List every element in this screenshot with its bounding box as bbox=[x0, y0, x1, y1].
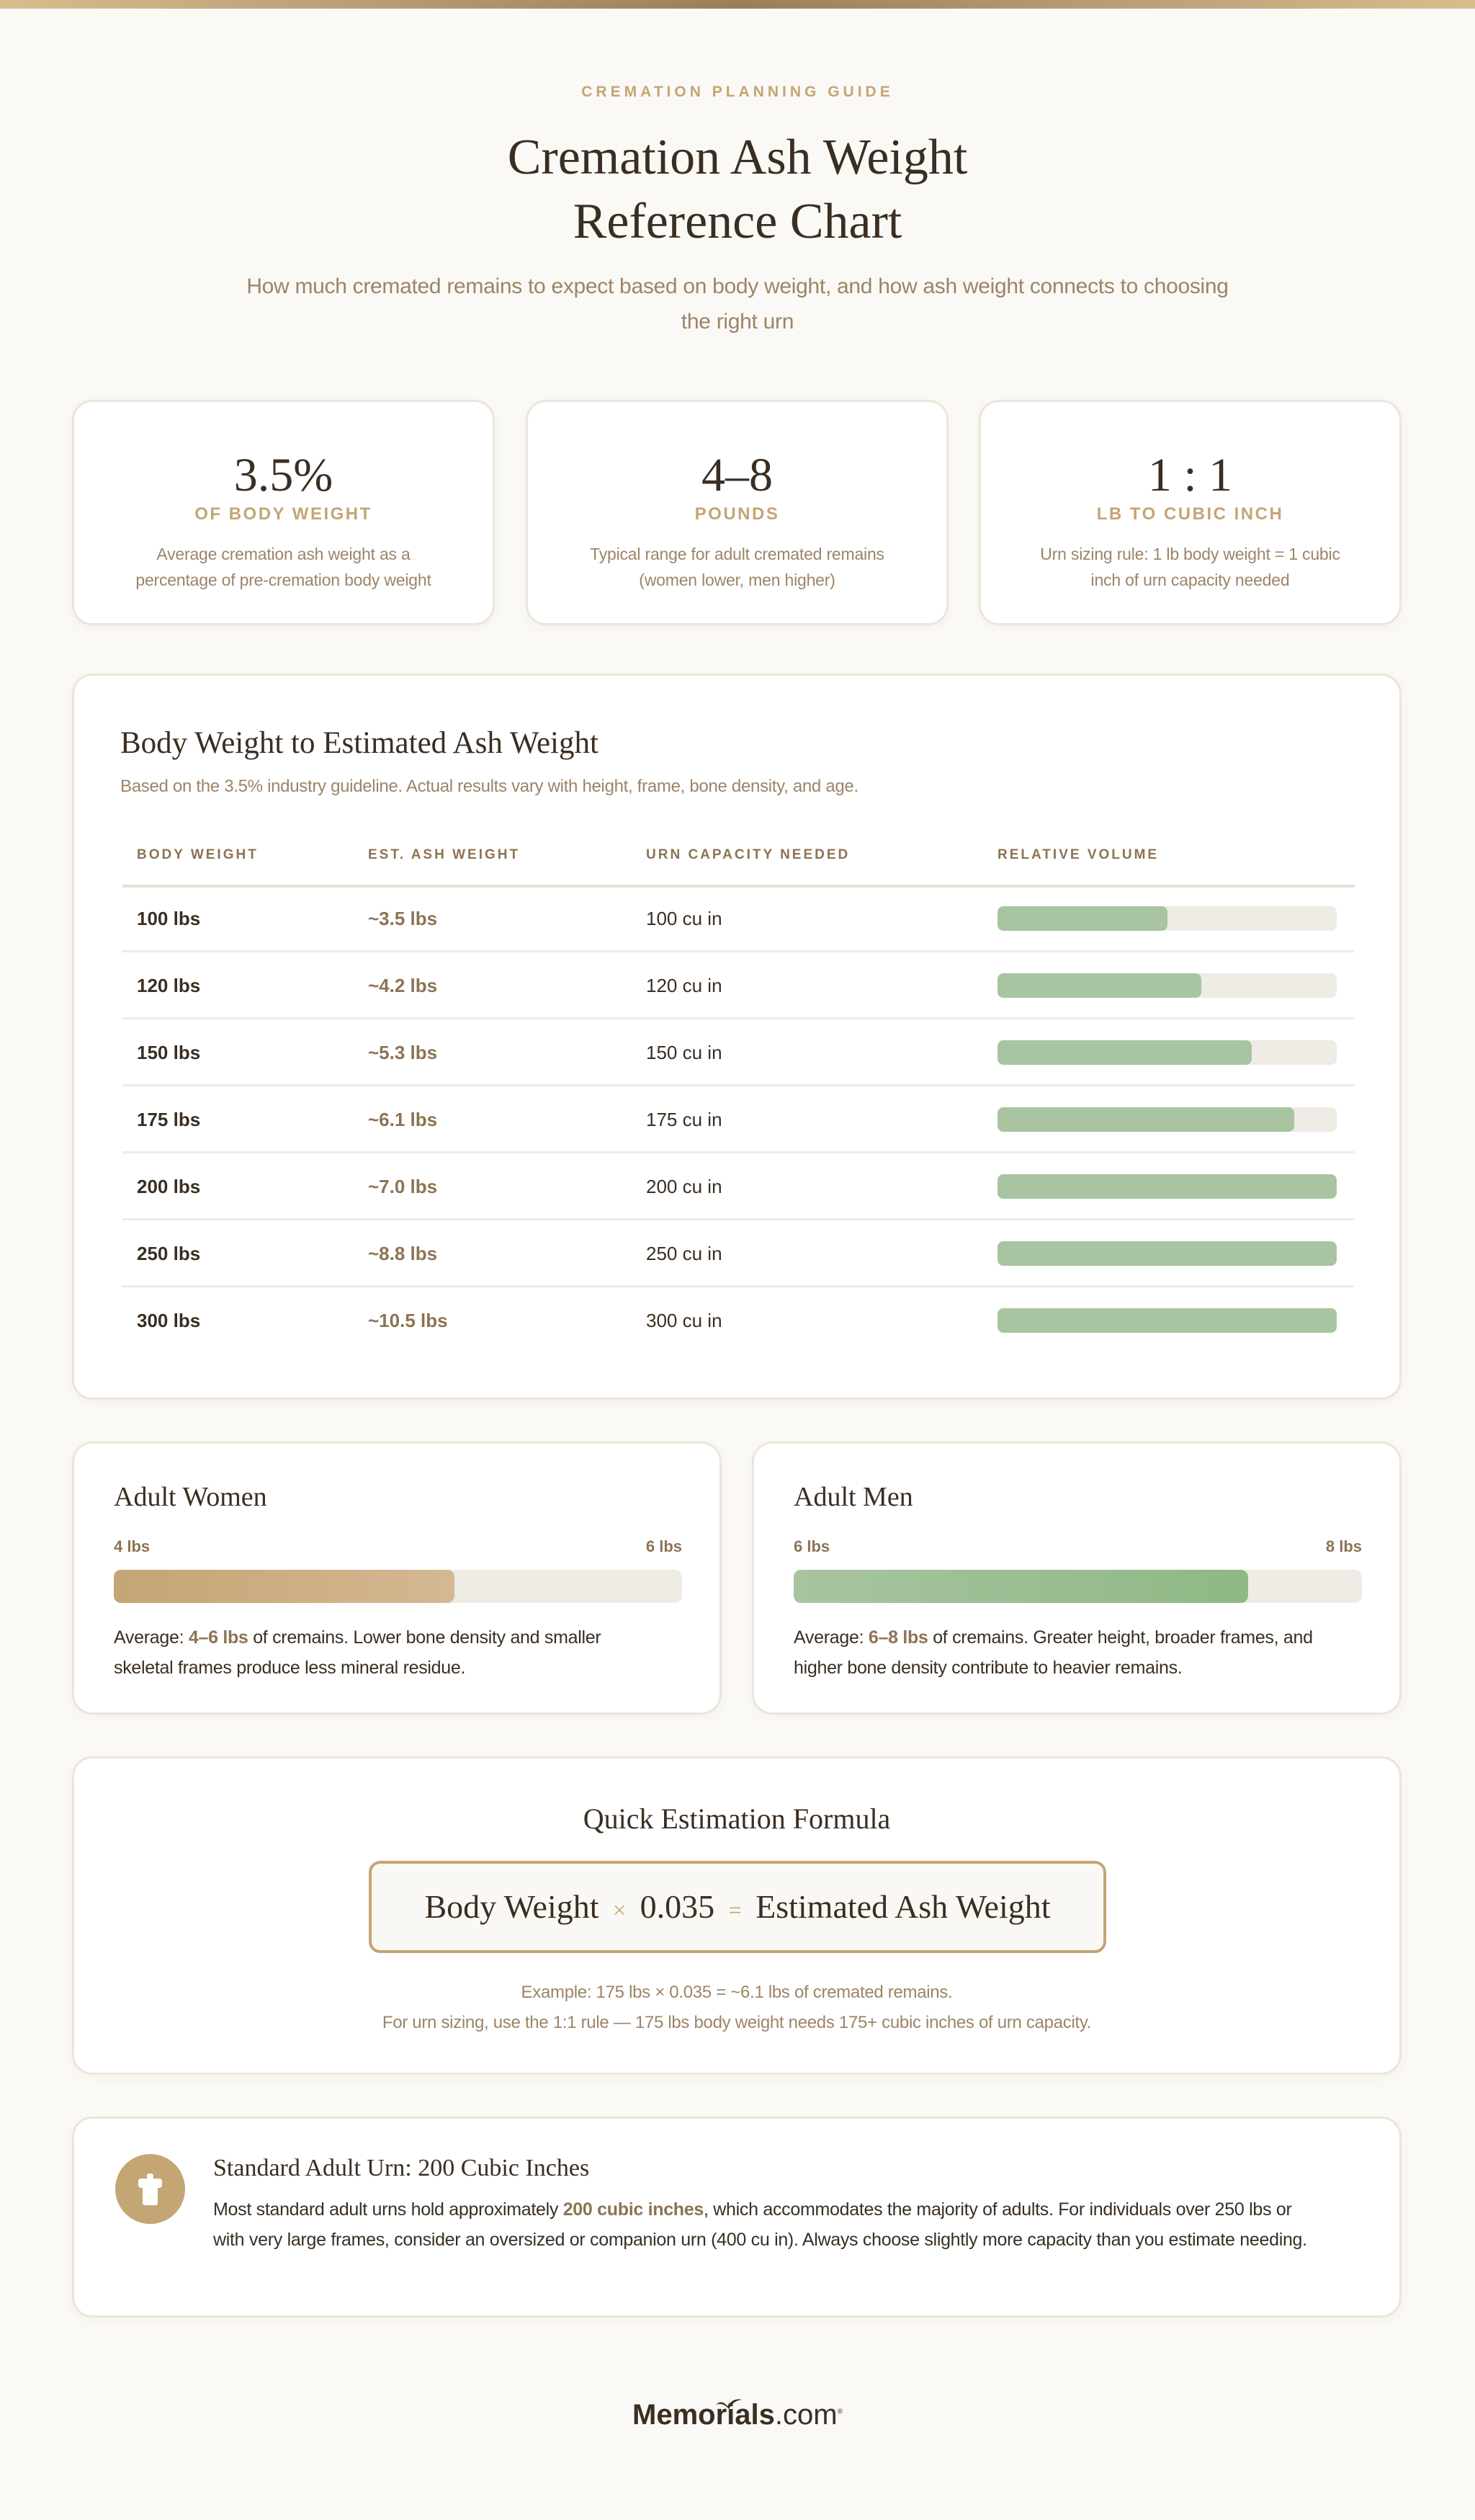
range labels: 8 lbs bbox=[1326, 1537, 1362, 1555]
panel: formula bbox=[72, 1756, 1402, 2075]
row 175: 175 cu in bbox=[646, 1109, 722, 1130]
stat number: 4–8 bbox=[701, 449, 773, 501]
row 150 bbox=[122, 1019, 1355, 1086]
range labels bbox=[794, 1537, 1362, 1555]
description: Average: 4–6 lbs of cremains. Lower bone density and smaller skeletal frames produce less mineral residue. bbox=[114, 1627, 601, 1678]
row 150: ~5.3 lbs bbox=[368, 1042, 437, 1063]
row 200: 200 cu in bbox=[646, 1176, 722, 1197]
panel: weight table bbox=[72, 674, 1402, 1400]
example text: For urn sizing, use the 1:1 rule — 175 lbs body weight needs 175+ cubic inches of urn capacity. bbox=[382, 2013, 1091, 2032]
row 120 bbox=[122, 952, 1355, 1019]
row 120: ~4.2 lbs bbox=[368, 975, 437, 996]
row 200: 200 lbs bbox=[137, 1176, 200, 1197]
logo: Memorials.com® bbox=[632, 2399, 843, 2431]
title: Cremation Ash Weight bbox=[508, 130, 967, 185]
subtitle: How much cremated remains to expect based on body weight, and how ash weight connects to choosing the right urn bbox=[246, 274, 1229, 334]
row 300: ~10.5 lbs bbox=[368, 1310, 448, 1331]
row 175: ~6.1 lbs bbox=[368, 1109, 437, 1130]
row 150: 150 cu in bbox=[646, 1042, 722, 1063]
heading: Adult Women bbox=[114, 1482, 267, 1512]
row 250 bbox=[122, 1220, 1355, 1287]
stat card: 3.5% bbox=[72, 400, 495, 625]
row 300: 300 lbs bbox=[137, 1310, 200, 1331]
row 175: 175 lbs bbox=[137, 1109, 200, 1130]
row 200 bbox=[122, 1153, 1355, 1220]
table header: BODY WEIGHT bbox=[137, 847, 259, 862]
callout body: Most standard adult urns hold approximately 200 cubic inches, which accommodates the majority of adults. For individuals over 250 lbs or with very large frames, consider an oversized or companion urn (400 cu in). Always choose slightly more capacity than you estimate needing. bbox=[213, 2199, 1307, 2250]
description: Average: 6–8 lbs of cremains. Greater height, broader frames, and higher bone density contribute to heavier remains. bbox=[794, 1627, 1313, 1678]
stat description: Typical range for adult cremated remains (women lower, men higher) bbox=[590, 545, 884, 589]
stat label: OF BODY WEIGHT bbox=[194, 504, 372, 524]
row 300 bbox=[137, 1308, 1337, 1333]
stat label: POUNDS bbox=[695, 504, 779, 524]
row 175 bbox=[122, 1086, 1355, 1153]
row 250: 250 cu in bbox=[646, 1243, 722, 1264]
row 300: 300 cu in bbox=[646, 1310, 722, 1331]
table header: RELATIVE VOLUME bbox=[997, 847, 1159, 862]
row 100: 100 lbs bbox=[137, 908, 200, 929]
row 150: 150 lbs bbox=[137, 1042, 200, 1063]
formula box bbox=[369, 1861, 1106, 1953]
top accent bar bbox=[0, 0, 1475, 9]
stat card: 4-8 bbox=[526, 400, 949, 625]
stat number: 3.5% bbox=[234, 449, 333, 501]
range labels bbox=[114, 1537, 682, 1555]
formula heading: Quick Estimation Formula bbox=[583, 1802, 890, 1835]
stat number: 1 : 1 bbox=[1148, 449, 1232, 501]
row 120: 120 lbs bbox=[137, 975, 200, 996]
table header: URN CAPACITY NEEDED bbox=[646, 847, 850, 862]
panel: standard urn callout bbox=[72, 2117, 1402, 2318]
example text bbox=[382, 1983, 1091, 2032]
panel: adult men bbox=[752, 1442, 1402, 1715]
title bbox=[508, 130, 967, 249]
example text: Example: 175 lbs × 0.035 = ~6.1 lbs of cremated remains. bbox=[521, 1983, 952, 2002]
stat label: LB TO CUBIC INCH bbox=[1097, 504, 1283, 524]
range labels: 4 lbs bbox=[114, 1537, 150, 1555]
row 250: ~8.8 lbs bbox=[368, 1243, 437, 1264]
row 100: 100 cu in bbox=[646, 908, 722, 929]
row 200: ~7.0 lbs bbox=[368, 1176, 437, 1197]
row 120: 120 cu in bbox=[646, 975, 722, 996]
panel: adult women bbox=[72, 1442, 722, 1715]
table title: Body Weight to Estimated Ash Weight bbox=[120, 726, 598, 760]
range bar bbox=[114, 1570, 682, 1603]
icon: urn bbox=[115, 2154, 185, 2224]
stat description: Urn sizing rule: 1 lb body weight = 1 cubic inch of urn capacity needed bbox=[1040, 545, 1340, 589]
title: Reference Chart bbox=[573, 194, 902, 249]
callout title: Standard Adult Urn: 200 Cubic Inches bbox=[213, 2155, 589, 2181]
eyebrow: CREMATION PLANNING GUIDE bbox=[581, 84, 894, 100]
table header bbox=[122, 676, 1355, 888]
heading: Adult Men bbox=[794, 1482, 913, 1512]
range labels: 6 lbs bbox=[646, 1537, 682, 1555]
row 100: ~3.5 lbs bbox=[368, 908, 437, 929]
range bar bbox=[794, 1570, 1362, 1603]
stat card: 1:1 bbox=[979, 400, 1402, 625]
formula box: Body Weight × 0.035 = Estimated Ash Weight bbox=[424, 1888, 1051, 1925]
row 100 bbox=[122, 885, 1355, 952]
row 250: 250 lbs bbox=[137, 1243, 200, 1264]
table subtitle: Based on the 3.5% industry guideline. Actual results vary with height, frame, bone density, and age. bbox=[120, 777, 858, 796]
stat description: Average cremation ash weight as a percentage of pre-cremation body weight bbox=[135, 545, 431, 589]
range labels: 6 lbs bbox=[794, 1537, 830, 1555]
table header: EST. ASH WEIGHT bbox=[368, 847, 520, 862]
